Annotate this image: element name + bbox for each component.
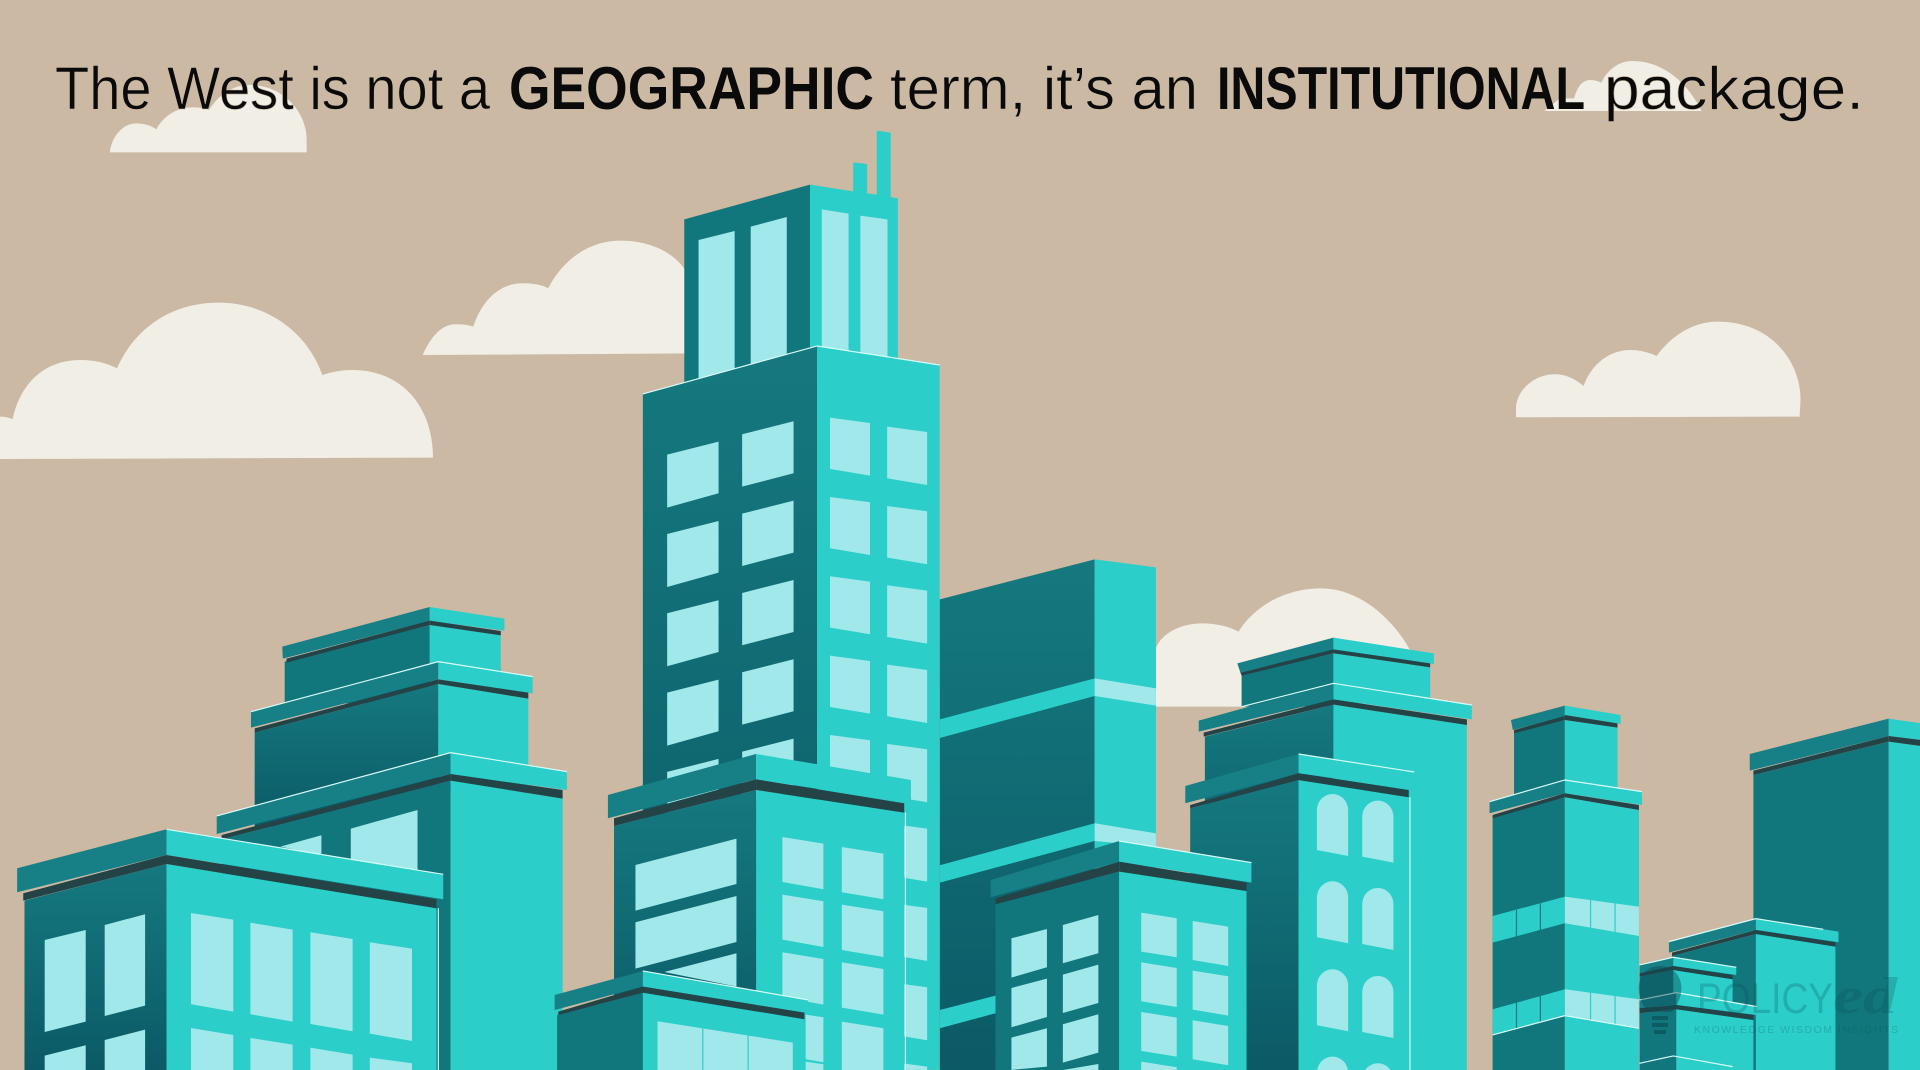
building: far right tall [1750, 719, 1920, 1070]
band bottom [940, 996, 996, 1028]
window band upper [1493, 897, 1639, 943]
title: term, it’s an [890, 55, 1198, 122]
windows [45, 913, 412, 1070]
building: front left [17, 829, 443, 1070]
building: slim tower right [1490, 706, 1642, 1070]
window [658, 1021, 793, 1070]
upper tier [1640, 957, 1736, 1010]
windows [1011, 913, 1228, 1070]
second tier [1199, 683, 1472, 1070]
third tier [217, 753, 567, 1070]
title [55, 55, 1864, 122]
cloud: behind right buildings [1156, 588, 1410, 707]
building: tall block right of tower [940, 559, 1156, 1070]
windows [635, 837, 883, 1070]
title: INSTITUTIONAL [1217, 55, 1585, 122]
lower tier [1640, 993, 1757, 1070]
logo tagline: KNOWLEDGE WISDOM INSIGHTS [1694, 1024, 1898, 1036]
cloud: behind title, left [110, 85, 307, 152]
building: front center left [608, 754, 911, 1070]
central tower [643, 131, 940, 1070]
building: front lower center [555, 971, 808, 1070]
building: back right with stepped tiers [1185, 638, 1472, 1070]
building: small right [1669, 919, 1839, 1070]
second tier [251, 662, 533, 827]
title: package. [1604, 55, 1864, 122]
cloud: right [1516, 322, 1801, 417]
title: GEOGRAPHIC [509, 55, 874, 122]
watermark: PolicyEd logo: ed [1833, 968, 1898, 1025]
window band lower [1493, 989, 1639, 1035]
top tier [1237, 638, 1434, 707]
building: smallest right, stacked tiers [1640, 957, 1757, 1070]
tower windows [667, 418, 927, 1070]
front tier with arched windows [1185, 754, 1414, 1070]
title: The West is not a [55, 55, 491, 122]
top tier [1511, 706, 1621, 807]
main shaft [1490, 780, 1642, 1070]
cloud: behind title, right [1544, 61, 1701, 111]
building: front right center [991, 841, 1251, 1070]
cloud: middle, behind tower [423, 241, 714, 355]
cloud: large left [0, 303, 433, 459]
band lower [940, 823, 1156, 883]
watermark: PolicyEd logo [1639, 966, 1898, 1036]
building: left back stepped [217, 607, 567, 1070]
logo wordmark: POLICY [1697, 975, 1833, 1023]
tower main block [643, 346, 940, 1070]
band upper [940, 678, 1156, 738]
top tier [282, 607, 504, 703]
tower top block [684, 131, 898, 383]
icon: light bulb [1639, 966, 1681, 1034]
